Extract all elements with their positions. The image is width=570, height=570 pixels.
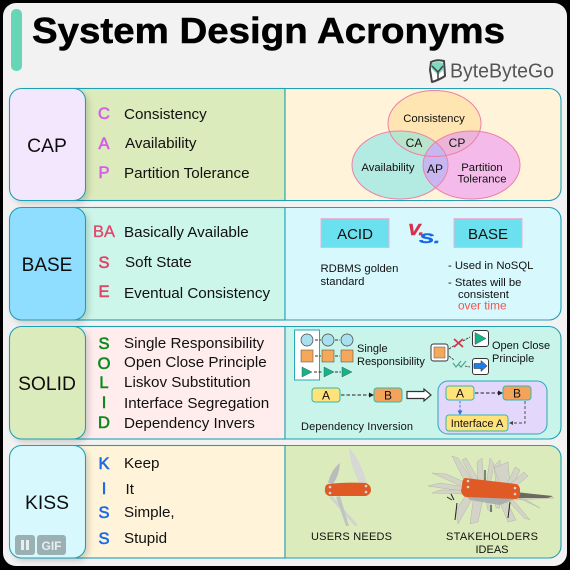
panel: KISS definitions [40,446,285,558]
single responsibility diagram [294,330,425,380]
Venn labels: Partition [461,162,503,174]
KISS label card: KISS [25,493,69,514]
SOLID letter list: O [98,355,111,373]
inversion diagram: B [513,386,521,400]
Venn labels: CP [449,136,465,150]
panel: CAP definitions [40,88,285,200]
BASE letter list: Basically Available [124,224,249,241]
open close diagram: Principle [492,353,534,365]
KISS letter list: S [98,504,110,522]
row: SOLID [10,326,561,439]
dependency before inversion: B [384,388,392,402]
SOLID label card [10,326,86,439]
dependency before inversion: A [322,388,330,402]
row: CAP [10,88,561,200]
CAP letter list: C [98,105,110,123]
Venn labels: CA [406,136,422,150]
knife captions: STAKEHOLDERS [446,531,538,543]
Venn labels: Tolerance [458,174,506,186]
SOLID letter list: I [102,394,106,412]
BASE letter list: Eventual Consistency [124,285,270,302]
CAP letter list [98,105,250,182]
BASE description: consistent [458,289,510,301]
title: System Design Acronyms [32,10,505,51]
inversion diagram: Interface A [451,418,504,430]
icon: simple pocket knife [325,448,371,526]
inversion diagram [438,381,547,434]
BASE letter list: E [98,283,110,301]
ByteByteGo logo: ByteByteGo [450,60,554,82]
panel: ACID vs BASE [285,208,561,320]
KISS letter list: It [126,481,135,498]
row: KISS [10,446,561,558]
BASE description [448,260,533,312]
CAP letter list: Availability [125,135,197,152]
SOLID letter list: Dependency Invers [124,415,255,432]
KISS letter list: S [98,530,110,548]
KISS letter list: I [102,480,106,498]
ACID description: standard [320,276,364,288]
panel: knives [285,446,561,558]
dependency inversion caption: Dependency Inversion [301,421,413,433]
ACID description: RDBMS golden [320,263,398,275]
SOLID letter list [98,335,269,432]
KISS letter list: Stupid [124,530,167,547]
SOLID letter list: D [98,414,110,432]
knife captions [311,531,538,556]
accent bar [11,9,22,71]
SOLID letter list: Interface Segregation [124,395,269,412]
SOLID label card: SOLID [18,374,76,395]
Venn labels: AP [427,162,443,176]
CAP label card [10,88,86,200]
BASE label card: BASE [22,255,72,276]
inversion diagram: A [456,386,464,400]
BASE description: - States will be [448,277,521,289]
CAP letter list: Partition Tolerance [124,165,250,182]
ACID box: ACID [337,226,373,243]
CAP letter list: P [98,164,110,182]
GIF badge [15,535,66,555]
SOLID letter list: Open Close Principle [124,354,267,371]
BASE letter list [93,223,270,302]
open close diagram: Open Close [492,340,550,352]
panel: CAP Venn diagram [285,88,561,200]
single responsibility diagram: Responsibility [357,356,425,368]
hollow arrow [407,389,431,401]
KISS letter list: Keep [124,455,159,472]
BASE box: BASE [468,226,508,243]
SOLID letter list: L [99,374,109,392]
Venn labels [361,113,506,186]
panel: SOLID diagrams [285,326,561,439]
SOLID letter list: Liskov Substitution [124,374,251,391]
CAP letter list: Consistency [124,106,207,123]
BASE label card [10,208,86,320]
open close diagram [431,330,550,374]
CAP letter list: A [98,135,110,153]
SOLID letter list: Single Responsibility [124,335,265,352]
BASE box [454,218,522,248]
icon: overloaded pocket knife [428,456,554,524]
knife captions: IDEAS [475,544,509,556]
BASE description: - Used in NoSQL [448,260,533,272]
ACID description [320,263,398,288]
KISS label card [10,446,86,558]
knife captions: USERS NEEDS [311,531,392,543]
KISS letter list [98,455,175,548]
row: BASE [10,208,561,320]
versus mark: S. [419,230,440,246]
BASE letter list: S [98,254,110,272]
versus mark: V. [408,220,424,239]
SOLID letter list: S [98,335,110,353]
KISS letter list: K [98,455,110,473]
GIF badge: GIF [42,539,62,553]
BASE description: over time [458,298,507,312]
panel: BASE definitions [40,208,285,320]
BASE letter list: Soft State [125,254,192,271]
ACID box [321,218,389,248]
panel: SOLID definitions [40,326,285,439]
CAP label card: CAP [27,136,67,157]
Venn labels: Availability [361,162,415,174]
KISS letter list: Simple, [124,504,175,521]
dependency before inversion [312,388,402,402]
single responsibility diagram: Single [357,343,388,355]
versus mark [408,220,440,246]
header [11,9,554,82]
BASE letter list: BA [93,223,115,241]
Venn labels: Consistency [403,113,465,125]
